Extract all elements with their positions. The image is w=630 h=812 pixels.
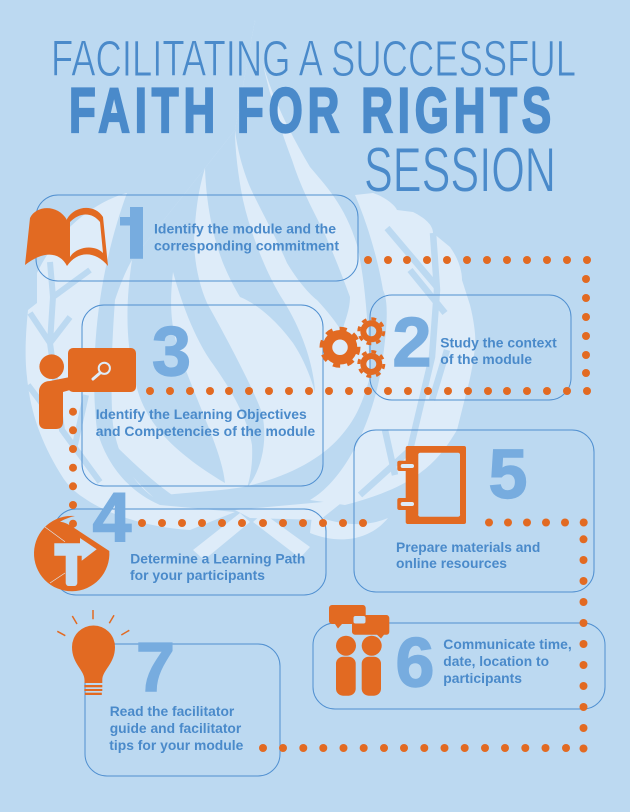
step 2 panel (322, 295, 571, 400)
step 5 panel: 5 (488, 435, 527, 513)
step 2 panel: of the module (440, 351, 532, 367)
background emblem: flame and wreath (26, 20, 475, 560)
icon: light bulb (57, 610, 129, 695)
icon: gears (322, 319, 384, 376)
step 7 panel: tips for your module (109, 737, 244, 753)
step 7 panel (57, 610, 280, 776)
number 1: 1 (116, 195, 155, 273)
icon: person with magnifier board (39, 348, 136, 429)
step 4 panel: 4 (92, 479, 132, 557)
step 7 panel: 7 (136, 628, 175, 706)
icon: signpost in circle (34, 516, 109, 591)
step 2 panel: Study the context (440, 334, 557, 350)
title (51, 30, 576, 206)
step 6 panel: date, location to (443, 653, 549, 669)
step 4 panel: Determine a Learning Path (130, 550, 305, 566)
step 2 panel: 2 (392, 303, 431, 381)
step 3 panel: Identify the Learning Objectives (96, 406, 307, 422)
step 4 panel (34, 479, 326, 595)
step 1 panel: corresponding commitment (154, 238, 339, 254)
step 3 panel: 3 (152, 312, 191, 390)
step 3 panel: and Competencies of the module (96, 423, 315, 439)
dotted path connecting the steps (69, 256, 591, 752)
step 6 panel: Communicate time, (443, 636, 572, 652)
step 5 panel: online resources (396, 555, 507, 571)
icon: two people talking (329, 605, 389, 696)
step 6 panel: participants (443, 670, 522, 686)
step 7 panel: guide and facilitator (110, 720, 242, 736)
step 7 panel: Read the facilitator (110, 703, 235, 719)
step 5 panel: Prepare materials and (396, 539, 540, 555)
number 1 (120, 207, 143, 259)
step 6 panel: 6 (396, 624, 434, 702)
step 1 panel: Identify the module and the (154, 220, 336, 236)
icon: open book (25, 208, 108, 266)
step 1 panel (25, 195, 358, 281)
step 3 panel (39, 305, 323, 486)
step 4 panel: for your participants (130, 567, 265, 583)
step 5 panel (354, 430, 594, 592)
icon: binder (397, 446, 466, 524)
step 6 panel (313, 605, 605, 709)
